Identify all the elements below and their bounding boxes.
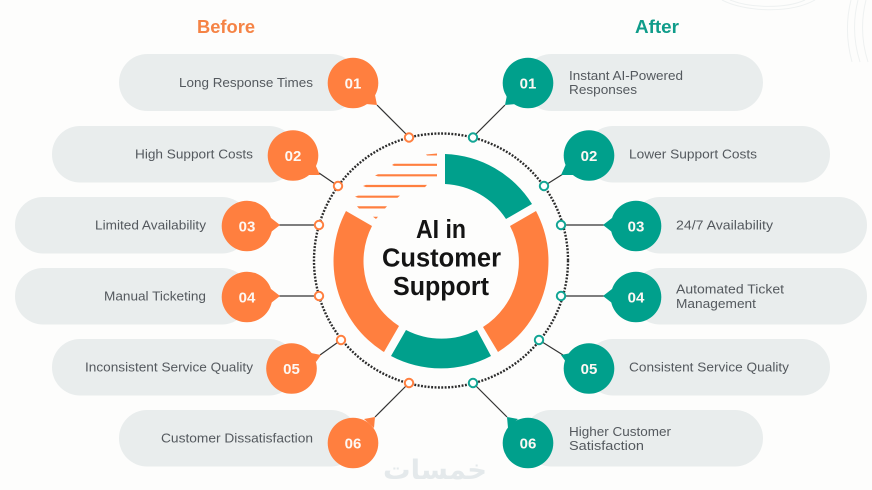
- after item 04: 04: [628, 290, 645, 306]
- before item 02: High Support Costs: [135, 146, 254, 162]
- watermark logo: خمسات: [383, 455, 487, 486]
- before item 06: [119, 379, 413, 468]
- before item 06: 06: [345, 436, 361, 452]
- segment: bottom teal: [391, 330, 491, 368]
- after item 01: [469, 54, 763, 142]
- segment: hatched orange: [355, 154, 437, 219]
- before item 05: 05: [283, 361, 300, 378]
- after item 05: 05: [581, 361, 597, 378]
- before item 03: [15, 197, 323, 254]
- segment: top teal: [445, 154, 532, 219]
- center title: Customer: [382, 244, 501, 272]
- before item 01: Long Response Times: [179, 75, 314, 90]
- after item 03: 03: [628, 218, 644, 236]
- center title: [382, 216, 501, 301]
- before item 04: [15, 268, 323, 324]
- after item 06: 06: [520, 436, 536, 452]
- after item 02: [540, 126, 830, 190]
- center title: AI in: [416, 216, 466, 244]
- after item 04: Management: [676, 296, 756, 311]
- before item 01: [119, 54, 413, 142]
- dotted ring: [314, 134, 568, 388]
- segment: left orange: [334, 211, 399, 352]
- center title: Support: [393, 273, 489, 301]
- after item 03: 24/7 Availability: [676, 218, 774, 232]
- after item 06: Higher Customer: [569, 424, 672, 439]
- before item 04: 04: [239, 290, 256, 306]
- before item 03: 03: [239, 218, 255, 236]
- after item 04: [557, 268, 867, 324]
- after item 02: 02: [581, 148, 597, 165]
- after item 05: [535, 336, 830, 396]
- after item 05: Consistent Service Quality: [629, 360, 790, 374]
- before item 04: Manual Ticketing: [104, 288, 206, 304]
- before item 05: [52, 336, 345, 396]
- before item 02: [52, 126, 342, 190]
- before item 05: Inconsistent Service Quality: [85, 360, 254, 374]
- after item 04: Automated Ticket: [676, 282, 784, 296]
- after item 01: Responses: [569, 82, 638, 97]
- before item 03: Limited Availability: [95, 218, 207, 232]
- heading: Before: Before: [197, 17, 255, 37]
- after item 02: Lower Support Costs: [629, 146, 758, 162]
- after item 03: [557, 197, 867, 254]
- donut chart: [334, 154, 548, 368]
- before item 02: 02: [285, 148, 301, 165]
- heading: After: After: [635, 17, 679, 37]
- after item 06: Satisfaction: [569, 438, 644, 453]
- after item 01: 01: [520, 76, 536, 92]
- before item 06: Customer Dissatisfaction: [161, 430, 313, 446]
- after item 06: [469, 379, 763, 468]
- before item 01: 01: [345, 76, 361, 92]
- after item 01: Instant AI-Powered: [569, 68, 683, 83]
- segment: right orange: [483, 211, 548, 352]
